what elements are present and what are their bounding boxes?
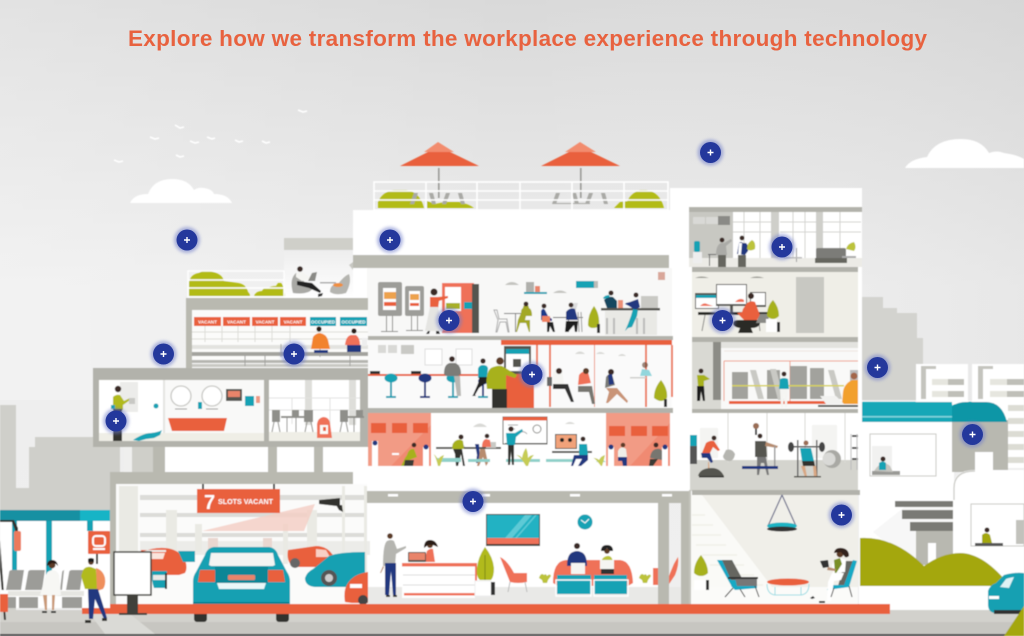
parked cars xyxy=(141,546,368,605)
hotspot 11 xyxy=(103,408,129,434)
hotspot 2 xyxy=(174,227,200,253)
lower wing room: washroom xyxy=(93,380,269,447)
birds xyxy=(114,110,307,162)
weight lifter xyxy=(742,423,778,475)
seats xyxy=(6,570,83,608)
plant xyxy=(588,306,600,333)
annex building right xyxy=(859,402,1024,636)
tower: gym xyxy=(690,413,860,495)
lobby xyxy=(367,503,689,605)
tower: data workstation xyxy=(692,272,858,337)
worker orange xyxy=(311,326,330,353)
cyclist xyxy=(698,436,735,478)
hotspot 5 xyxy=(436,308,462,334)
sign labels: VACANT xyxy=(227,320,246,324)
orange kiosk with screen xyxy=(504,346,534,408)
upper right window xyxy=(971,504,1024,546)
reception desk xyxy=(402,563,477,598)
hanging swing xyxy=(767,495,797,532)
video call person xyxy=(571,437,588,466)
picnic tables xyxy=(410,193,608,204)
lower wing room: offices xyxy=(269,380,368,447)
orange base strip xyxy=(82,604,890,614)
right tower shell xyxy=(670,188,862,495)
orange chair xyxy=(500,557,527,592)
main building shell xyxy=(353,210,690,495)
counter with stools xyxy=(367,371,488,398)
slots vacant sign xyxy=(197,484,280,514)
person with laptop xyxy=(296,266,323,297)
exercise balls xyxy=(822,434,858,470)
car right xyxy=(988,573,1024,614)
umbrella left xyxy=(400,142,479,198)
wall tv xyxy=(486,514,540,546)
hotspot 6 xyxy=(710,308,736,334)
annex roof xyxy=(859,402,1007,422)
umbrella right xyxy=(541,142,620,198)
video screen xyxy=(552,434,592,453)
laptop engineer xyxy=(818,373,858,407)
bus sign xyxy=(88,531,110,564)
railing xyxy=(374,182,668,210)
hotspot 10 xyxy=(519,362,545,388)
title: Explore how we transform the workplace experience through technology xyxy=(128,26,927,51)
hotspot 8 xyxy=(281,341,307,367)
planters xyxy=(437,458,606,462)
hotspot 12 xyxy=(960,422,986,448)
orange backpack xyxy=(317,417,332,438)
pole at left xyxy=(0,520,21,620)
pillars below wing xyxy=(124,447,360,473)
sofa office xyxy=(784,242,856,263)
hotspot 9 xyxy=(864,354,890,380)
lounge chair left xyxy=(292,273,313,293)
tower: lounge with swing xyxy=(689,490,858,605)
sign labels xyxy=(198,320,366,324)
meeting table xyxy=(436,434,501,466)
lower wing band xyxy=(93,368,368,380)
ground road xyxy=(0,610,1024,636)
sign labels: VACANT xyxy=(198,320,217,324)
desks xyxy=(272,410,364,432)
mirrors xyxy=(171,386,222,406)
hotspot buttons xyxy=(103,140,986,528)
bus stop xyxy=(0,510,151,623)
lobby band xyxy=(360,491,689,503)
desk rows xyxy=(192,344,368,367)
woman in chair xyxy=(810,548,857,603)
plant xyxy=(475,547,495,596)
slots vacant sign: SLOTS VACANT xyxy=(218,497,273,506)
meeting people xyxy=(547,362,652,404)
roof terrace xyxy=(374,142,668,210)
plant xyxy=(766,300,780,332)
hotspot 1 xyxy=(698,140,724,166)
hotspot 14 xyxy=(828,502,854,528)
plants xyxy=(433,448,605,466)
bushes xyxy=(378,190,664,208)
green hills xyxy=(860,538,1010,586)
man in green xyxy=(486,357,517,408)
technician teal xyxy=(779,372,789,407)
coffee table xyxy=(767,578,809,595)
man with bag xyxy=(81,558,107,623)
parking garage xyxy=(110,472,370,622)
hotspot 3 xyxy=(377,227,403,253)
bench press xyxy=(788,440,825,478)
signs vacant xyxy=(194,317,306,326)
right orange room xyxy=(606,413,670,466)
vending machine xyxy=(442,283,479,333)
centre car xyxy=(193,547,290,622)
cloud left xyxy=(130,179,232,203)
ceiling beams xyxy=(140,495,365,537)
water puddle xyxy=(133,430,162,441)
slots vacant sign: 7 xyxy=(204,492,215,514)
kiosks xyxy=(378,282,424,332)
floor lamps xyxy=(473,422,575,427)
seated man gray xyxy=(444,356,461,396)
security camera xyxy=(319,498,343,512)
skyline right xyxy=(858,297,1024,468)
sign labels: VACANT xyxy=(284,320,303,324)
woman waiting xyxy=(40,560,61,613)
floor: cafe xyxy=(360,268,673,340)
ad board xyxy=(114,552,151,615)
wall device xyxy=(154,389,260,409)
lounge chair right xyxy=(330,274,350,294)
clock xyxy=(578,514,592,530)
seated woman teal xyxy=(472,358,488,396)
hotspot 4 xyxy=(769,234,795,260)
hotspot 7 xyxy=(150,341,176,367)
technician green xyxy=(697,369,710,401)
receptionist xyxy=(408,540,438,562)
armchair xyxy=(717,560,759,597)
pillars xyxy=(119,486,367,606)
cloud right xyxy=(905,139,1024,168)
left orange room xyxy=(368,413,431,466)
person in washroom xyxy=(111,386,130,441)
camera cone xyxy=(202,504,315,531)
tower: executive office xyxy=(689,212,862,267)
signs occupied xyxy=(310,317,367,326)
sofa with people xyxy=(539,543,651,596)
shelves and lamps xyxy=(505,272,665,294)
roof garden left xyxy=(188,271,285,297)
cafe tables and diners xyxy=(494,302,583,332)
hotspot 13 xyxy=(460,488,486,514)
worker pink xyxy=(345,328,367,352)
band top of cafe xyxy=(353,255,669,268)
upper wing band xyxy=(186,298,368,310)
sign labels: OCCUPIED xyxy=(341,320,366,324)
roof lounge xyxy=(284,250,353,298)
glass meeting room xyxy=(501,340,673,407)
skyline left xyxy=(0,405,120,615)
plant xyxy=(654,380,667,407)
white slab xyxy=(353,466,690,491)
sign labels: VACANT xyxy=(256,320,275,324)
basin xyxy=(168,418,227,431)
standing man xyxy=(380,533,406,597)
annex window with person xyxy=(870,434,936,476)
floor: lounge and meeting glass xyxy=(360,340,673,413)
tower band top xyxy=(689,207,862,212)
tower: server room xyxy=(692,342,858,409)
upper wing room: hot desks xyxy=(186,310,368,368)
executive men xyxy=(708,236,755,267)
whiteboard xyxy=(503,417,547,444)
monitors xyxy=(695,284,766,312)
sign labels: OCCUPIED xyxy=(311,320,336,324)
chair behind column xyxy=(653,557,678,585)
man at desk xyxy=(733,293,770,333)
bar counter and patrons xyxy=(601,290,660,335)
presenter xyxy=(506,426,523,465)
plant xyxy=(694,555,709,590)
frames on wall xyxy=(378,345,472,365)
upper wing top slab xyxy=(284,238,353,250)
lower wing slab xyxy=(93,441,368,447)
woman at vending xyxy=(425,288,448,334)
house xyxy=(873,501,953,565)
floor: collaboration xyxy=(353,413,690,491)
